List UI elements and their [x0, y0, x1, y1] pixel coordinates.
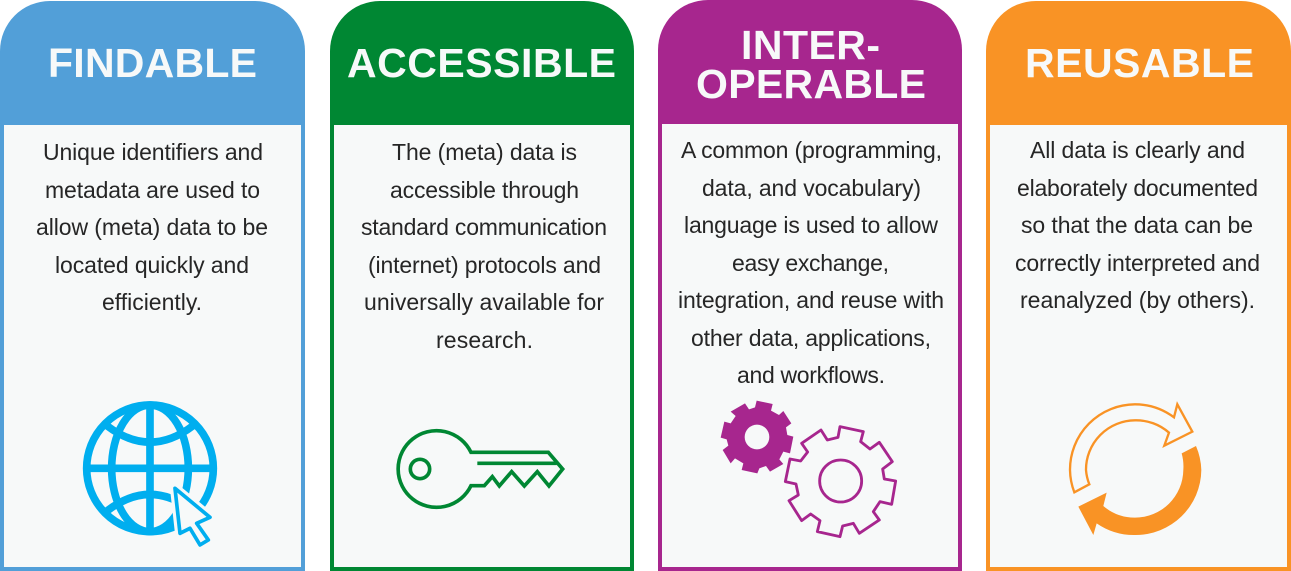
text block: reusable description: reanalyzed (by others). [1020, 287, 1255, 313]
panel: accessible [330, 1, 634, 571]
text block: reusable description: All data is clearly and [1030, 137, 1245, 163]
text block: findable description: metadata are used to [45, 177, 260, 203]
text block: interoperable description: easy exchange, [732, 250, 889, 276]
text block: accessible description: (internet) protocols and [368, 252, 601, 278]
panel body: reusable [990, 125, 1287, 567]
panel body: findable [4, 125, 301, 567]
text block: accessible description: The (meta) data is [392, 139, 577, 165]
text block: accessible description: accessible through [390, 177, 579, 203]
icon: globe with cursor [87, 405, 213, 545]
text block: findable description: efficiently. [102, 289, 202, 315]
icon: solid gear [721, 401, 793, 473]
text block: reusable description: so that the data can be [1021, 212, 1253, 238]
icon: key [398, 431, 563, 507]
text block: interoperable description: language is used to allow [684, 212, 938, 238]
text block: interoperable description [678, 137, 944, 388]
text block: accessible description: standard communication [361, 214, 607, 240]
icon: outline gear [785, 427, 896, 537]
text block: accessible description [361, 139, 607, 353]
text block: findable description: Unique identifiers and [43, 139, 263, 165]
text block: reusable description: elaborately documented [1017, 175, 1258, 201]
panel: interoperable [658, 0, 962, 571]
panel body: interoperable [662, 124, 958, 567]
text block: interoperable description: and workflows. [737, 362, 885, 388]
text block: accessible description: research. [436, 327, 533, 353]
panel background: findable [0, 1, 305, 571]
heading: findable: FINDABLE [48, 40, 257, 86]
text block: interoperable description: A common (programming, [681, 137, 942, 163]
panel body: accessible [334, 125, 630, 567]
heading: interoperable: INTER- [741, 22, 880, 68]
text block: findable description [36, 139, 268, 315]
panel background: interoperable [658, 0, 962, 571]
panel background: reusable [986, 1, 1291, 571]
heading: interoperable [696, 22, 926, 107]
text block: accessible description: universally available for [364, 289, 604, 315]
icon: gears [721, 401, 896, 537]
text block: reusable description [1015, 137, 1260, 313]
panel: findable [0, 1, 305, 571]
icon: solid arrow [1078, 446, 1201, 535]
heading: accessible: ACCESSIBLE [347, 40, 616, 86]
heading: reusable: REUSABLE [1025, 40, 1254, 86]
text block: interoperable description: integration, and reuse with [678, 287, 944, 313]
text block: reusable description: correctly interpreted and [1015, 250, 1260, 276]
panel background: accessible [330, 1, 634, 571]
icon: outline arrow [1070, 404, 1192, 492]
text block: findable description: allow (meta) data to be [36, 214, 268, 240]
panel: reusable [986, 1, 1291, 571]
icon: circular arrows [1070, 404, 1201, 535]
text block: findable description: located quickly and [55, 252, 249, 278]
text block: interoperable description: other data, applications, [691, 325, 931, 351]
text block: interoperable description: data, and vocabulary) [702, 175, 921, 201]
heading: interoperable: OPERABLE [696, 61, 926, 107]
